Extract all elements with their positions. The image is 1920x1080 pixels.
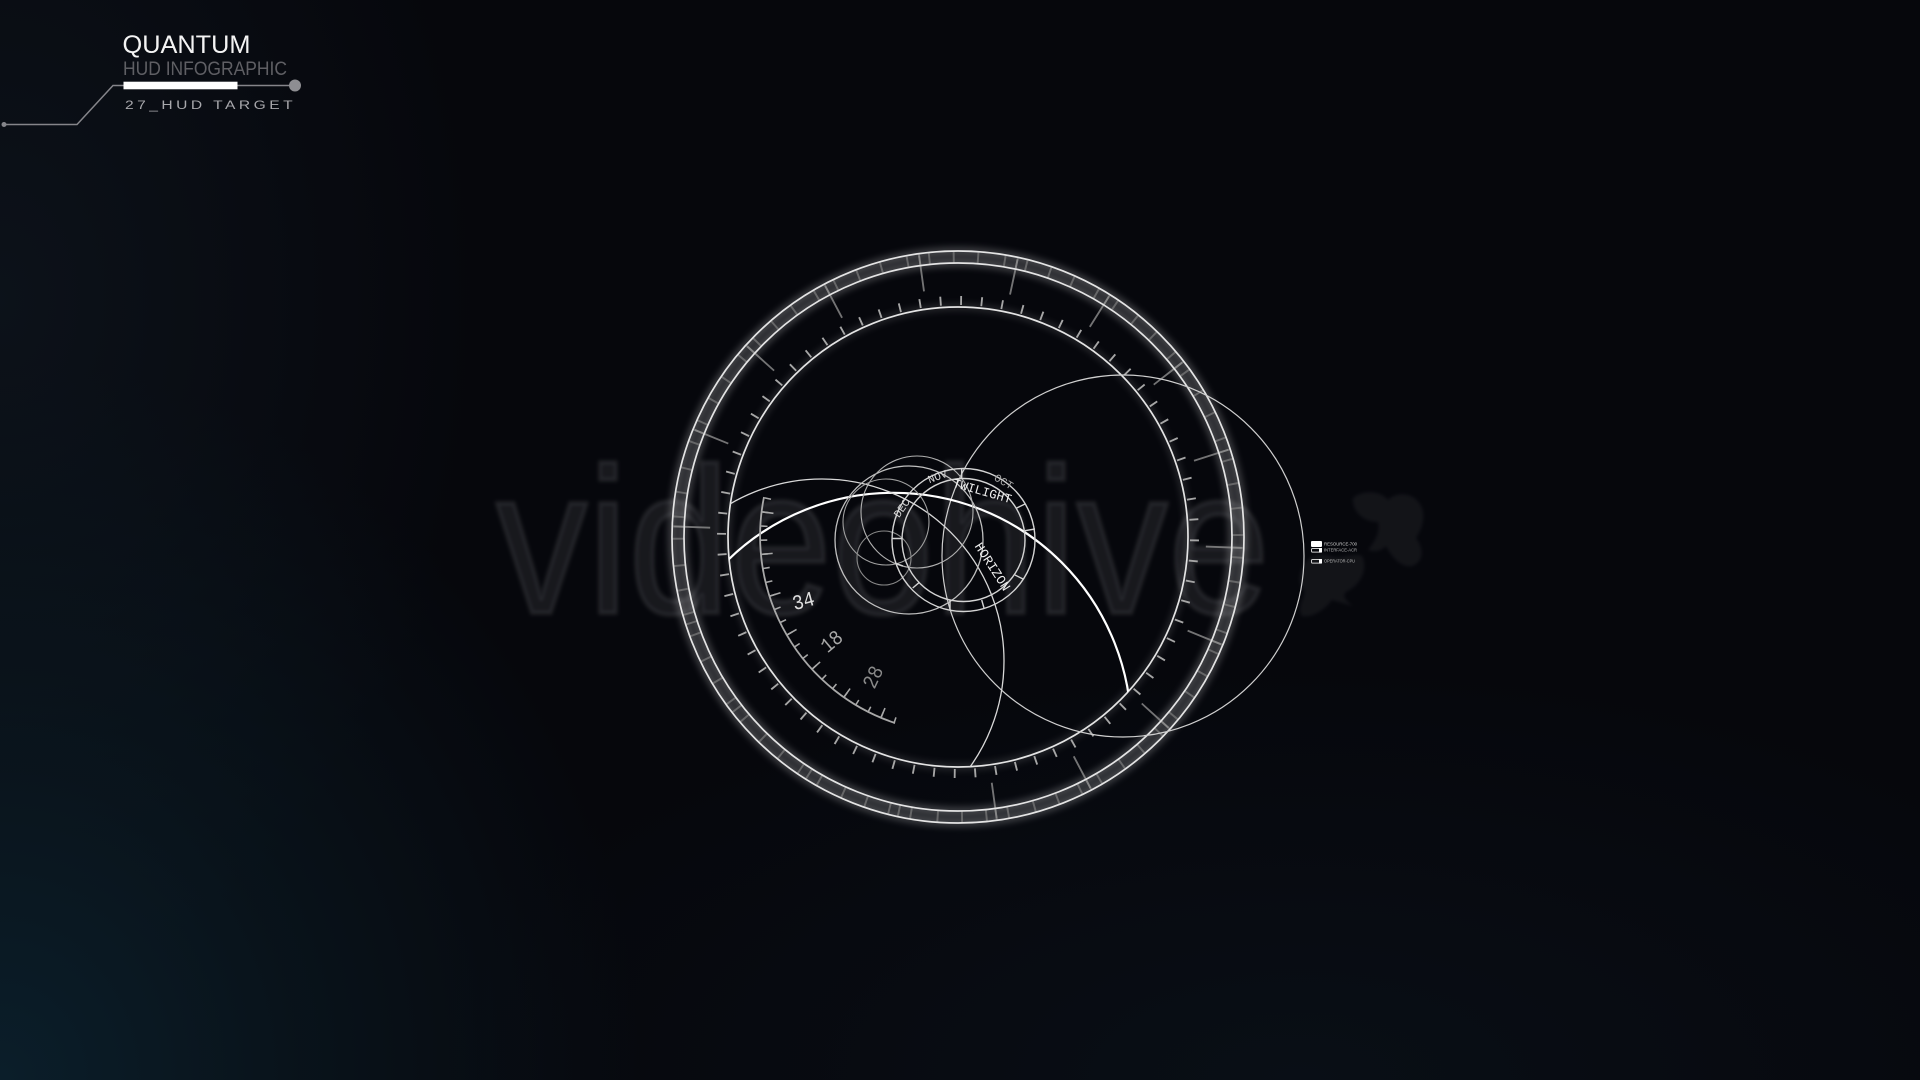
connector start dot	[2, 122, 6, 127]
scale arc	[760, 497, 895, 723]
long scale ticks	[764, 498, 896, 721]
month label NOV: NOV	[927, 469, 950, 487]
thin large circle	[942, 375, 1304, 737]
ring glow	[672, 251, 1244, 823]
title: quantum header	[2, 31, 301, 127]
watermark: videohive	[496, 426, 1270, 658]
legend row 3: OPERATOR-CPU	[1324, 558, 1355, 564]
scale label 28: 28	[860, 663, 890, 693]
clipped arcs	[729, 478, 1129, 766]
heading: QUANTUM	[122, 31, 250, 59]
legend	[1311, 541, 1358, 564]
outer band fill	[678, 257, 1238, 817]
month label OCT: OCT	[991, 473, 1015, 493]
scale label 34: 34	[790, 589, 818, 617]
icon: watermark logo	[1300, 492, 1423, 616]
band ticks	[678, 257, 1238, 817]
left graduated scale	[760, 497, 897, 723]
legend row 1: RESOURCE-700	[1324, 542, 1358, 546]
label HORIZON: HORIZON	[971, 540, 1013, 594]
subheading: HUD INFOGRAPHIC	[123, 58, 287, 80]
thick arc	[729, 492, 1129, 692]
outer rings	[672, 251, 1244, 823]
caption: 27_HUD TARGET	[125, 98, 293, 112]
connector end dot	[289, 80, 301, 92]
short scale ticks	[766, 498, 897, 718]
legend row 2: INTERFACE-ACR	[1324, 548, 1357, 552]
long ticks	[692, 271, 1224, 803]
month label DEC: DEC	[892, 497, 914, 521]
inner overlapping circles	[835, 456, 983, 614]
label TWILIGHT: TWILIGHT	[951, 477, 1013, 507]
scale label 18: 18	[817, 627, 849, 659]
scale ticks	[722, 300, 1194, 774]
connector line	[4, 86, 295, 124]
thin arc	[730, 478, 1005, 766]
target dial	[665, 244, 1305, 830]
calendar ring	[892, 468, 1035, 612]
progress bar	[124, 82, 238, 89]
